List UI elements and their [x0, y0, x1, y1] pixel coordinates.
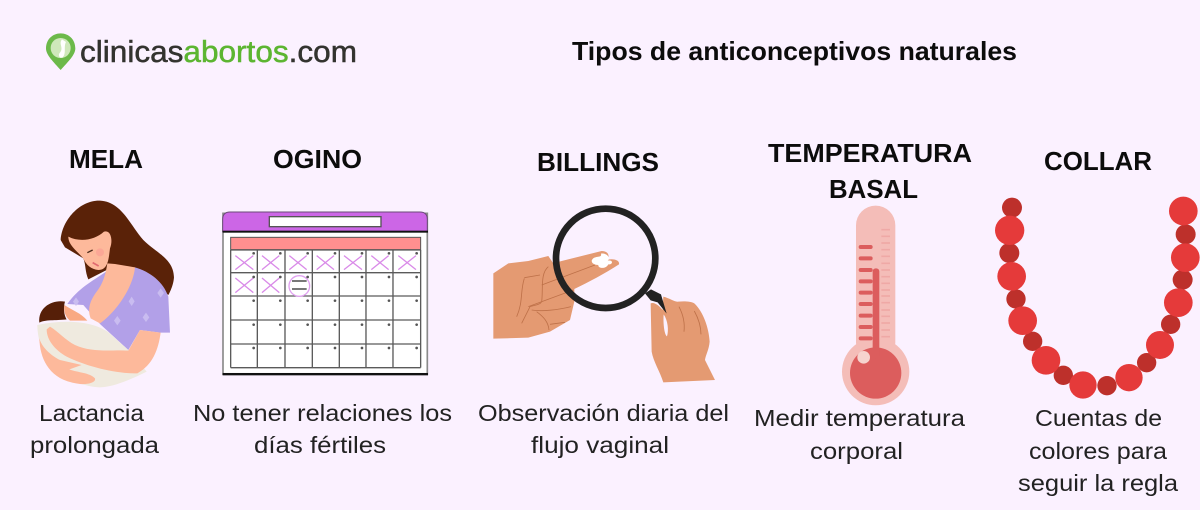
description: prolongada	[30, 432, 159, 458]
description	[478, 400, 729, 458]
logo wordmark: clinicasabortos.com	[80, 34, 357, 69]
panel: OGINO	[193, 144, 452, 458]
description: Lactancia	[39, 400, 144, 426]
icon: bead necklace	[995, 197, 1200, 399]
description: Cuentas de	[1035, 405, 1162, 431]
description: flujo vaginal	[531, 432, 669, 458]
description: corporal	[810, 438, 903, 464]
icon: thermometer	[842, 206, 909, 405]
heading: OGINO: OGINO	[273, 144, 362, 174]
description: Medir temperatura	[754, 405, 965, 431]
description: Observación diaria del	[478, 400, 729, 426]
title: Tipos de anticonceptivos naturales	[572, 36, 1017, 66]
heading: TEMPERATURA BASAL: BASAL	[829, 174, 918, 204]
heading: TEMPERATURA BASAL	[768, 138, 972, 204]
panel: COLLAR	[995, 146, 1200, 496]
description: colores para	[1029, 438, 1167, 464]
heading: TEMPERATURA BASAL: TEMPERATURA	[768, 138, 972, 168]
description	[193, 400, 452, 458]
heading: MELA: MELA	[69, 144, 143, 174]
description: días fértiles	[254, 432, 386, 458]
description: seguir la regla	[1018, 470, 1178, 496]
icon: calendar	[223, 212, 428, 375]
icon: green location pin	[46, 33, 75, 70]
panel: MELA	[30, 144, 174, 458]
icon: hands with magnifying glass	[493, 209, 715, 382]
description	[1018, 405, 1178, 496]
panel: BILLINGS	[478, 147, 729, 458]
logo: clinicasabortos.com	[46, 33, 357, 70]
panel: TEMPERATURA BASAL	[754, 138, 972, 464]
icon: breastfeeding mother	[37, 201, 174, 387]
description	[754, 405, 965, 464]
heading: COLLAR: COLLAR	[1044, 146, 1152, 176]
description	[30, 400, 159, 458]
heading: BILLINGS: BILLINGS	[537, 147, 659, 177]
description: No tener relaciones los	[193, 400, 452, 426]
